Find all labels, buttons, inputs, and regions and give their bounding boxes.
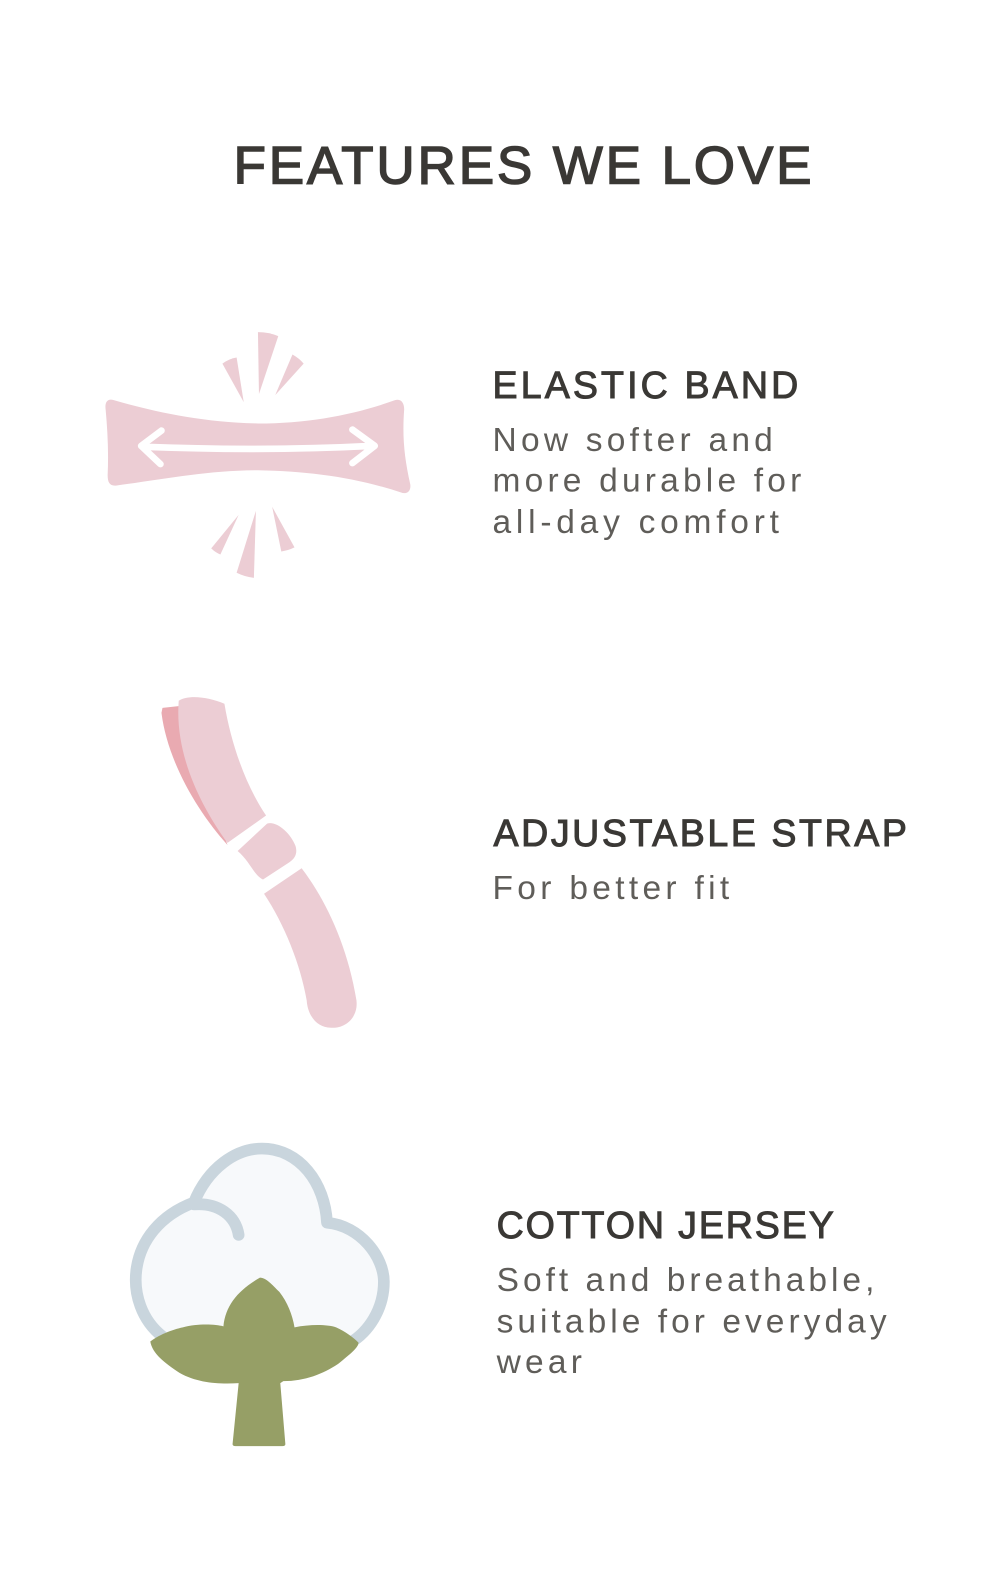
text: cotton jersey: wear: [496, 1344, 582, 1381]
text: elastic band: more durable for: [493, 463, 801, 500]
text: cotton jersey: Soft and breathable,: [497, 1262, 874, 1299]
text: elastic band: Now softer and: [493, 422, 773, 459]
text: cotton jersey: suitable for everyday: [497, 1303, 887, 1340]
title: FEATURES WE LOVE: [234, 136, 811, 195]
text: cotton jersey: COTTON JERSEY: [497, 1204, 834, 1246]
text: elastic band: [493, 364, 801, 541]
text: elastic band: ELASTIC BAND: [493, 364, 798, 406]
icon: elastic band: [105, 332, 410, 578]
text: adjustable strap: [493, 812, 907, 907]
text: cotton jersey: [496, 1204, 887, 1381]
text: adjustable strap: ADJUSTABLE STRAP: [494, 812, 907, 854]
icon: cotton boll: [136, 1149, 384, 1446]
icon: adjustable strap: [161, 697, 357, 1028]
text: adjustable strap: For better fit: [493, 870, 730, 907]
text: elastic band: all-day comfort: [493, 504, 780, 541]
